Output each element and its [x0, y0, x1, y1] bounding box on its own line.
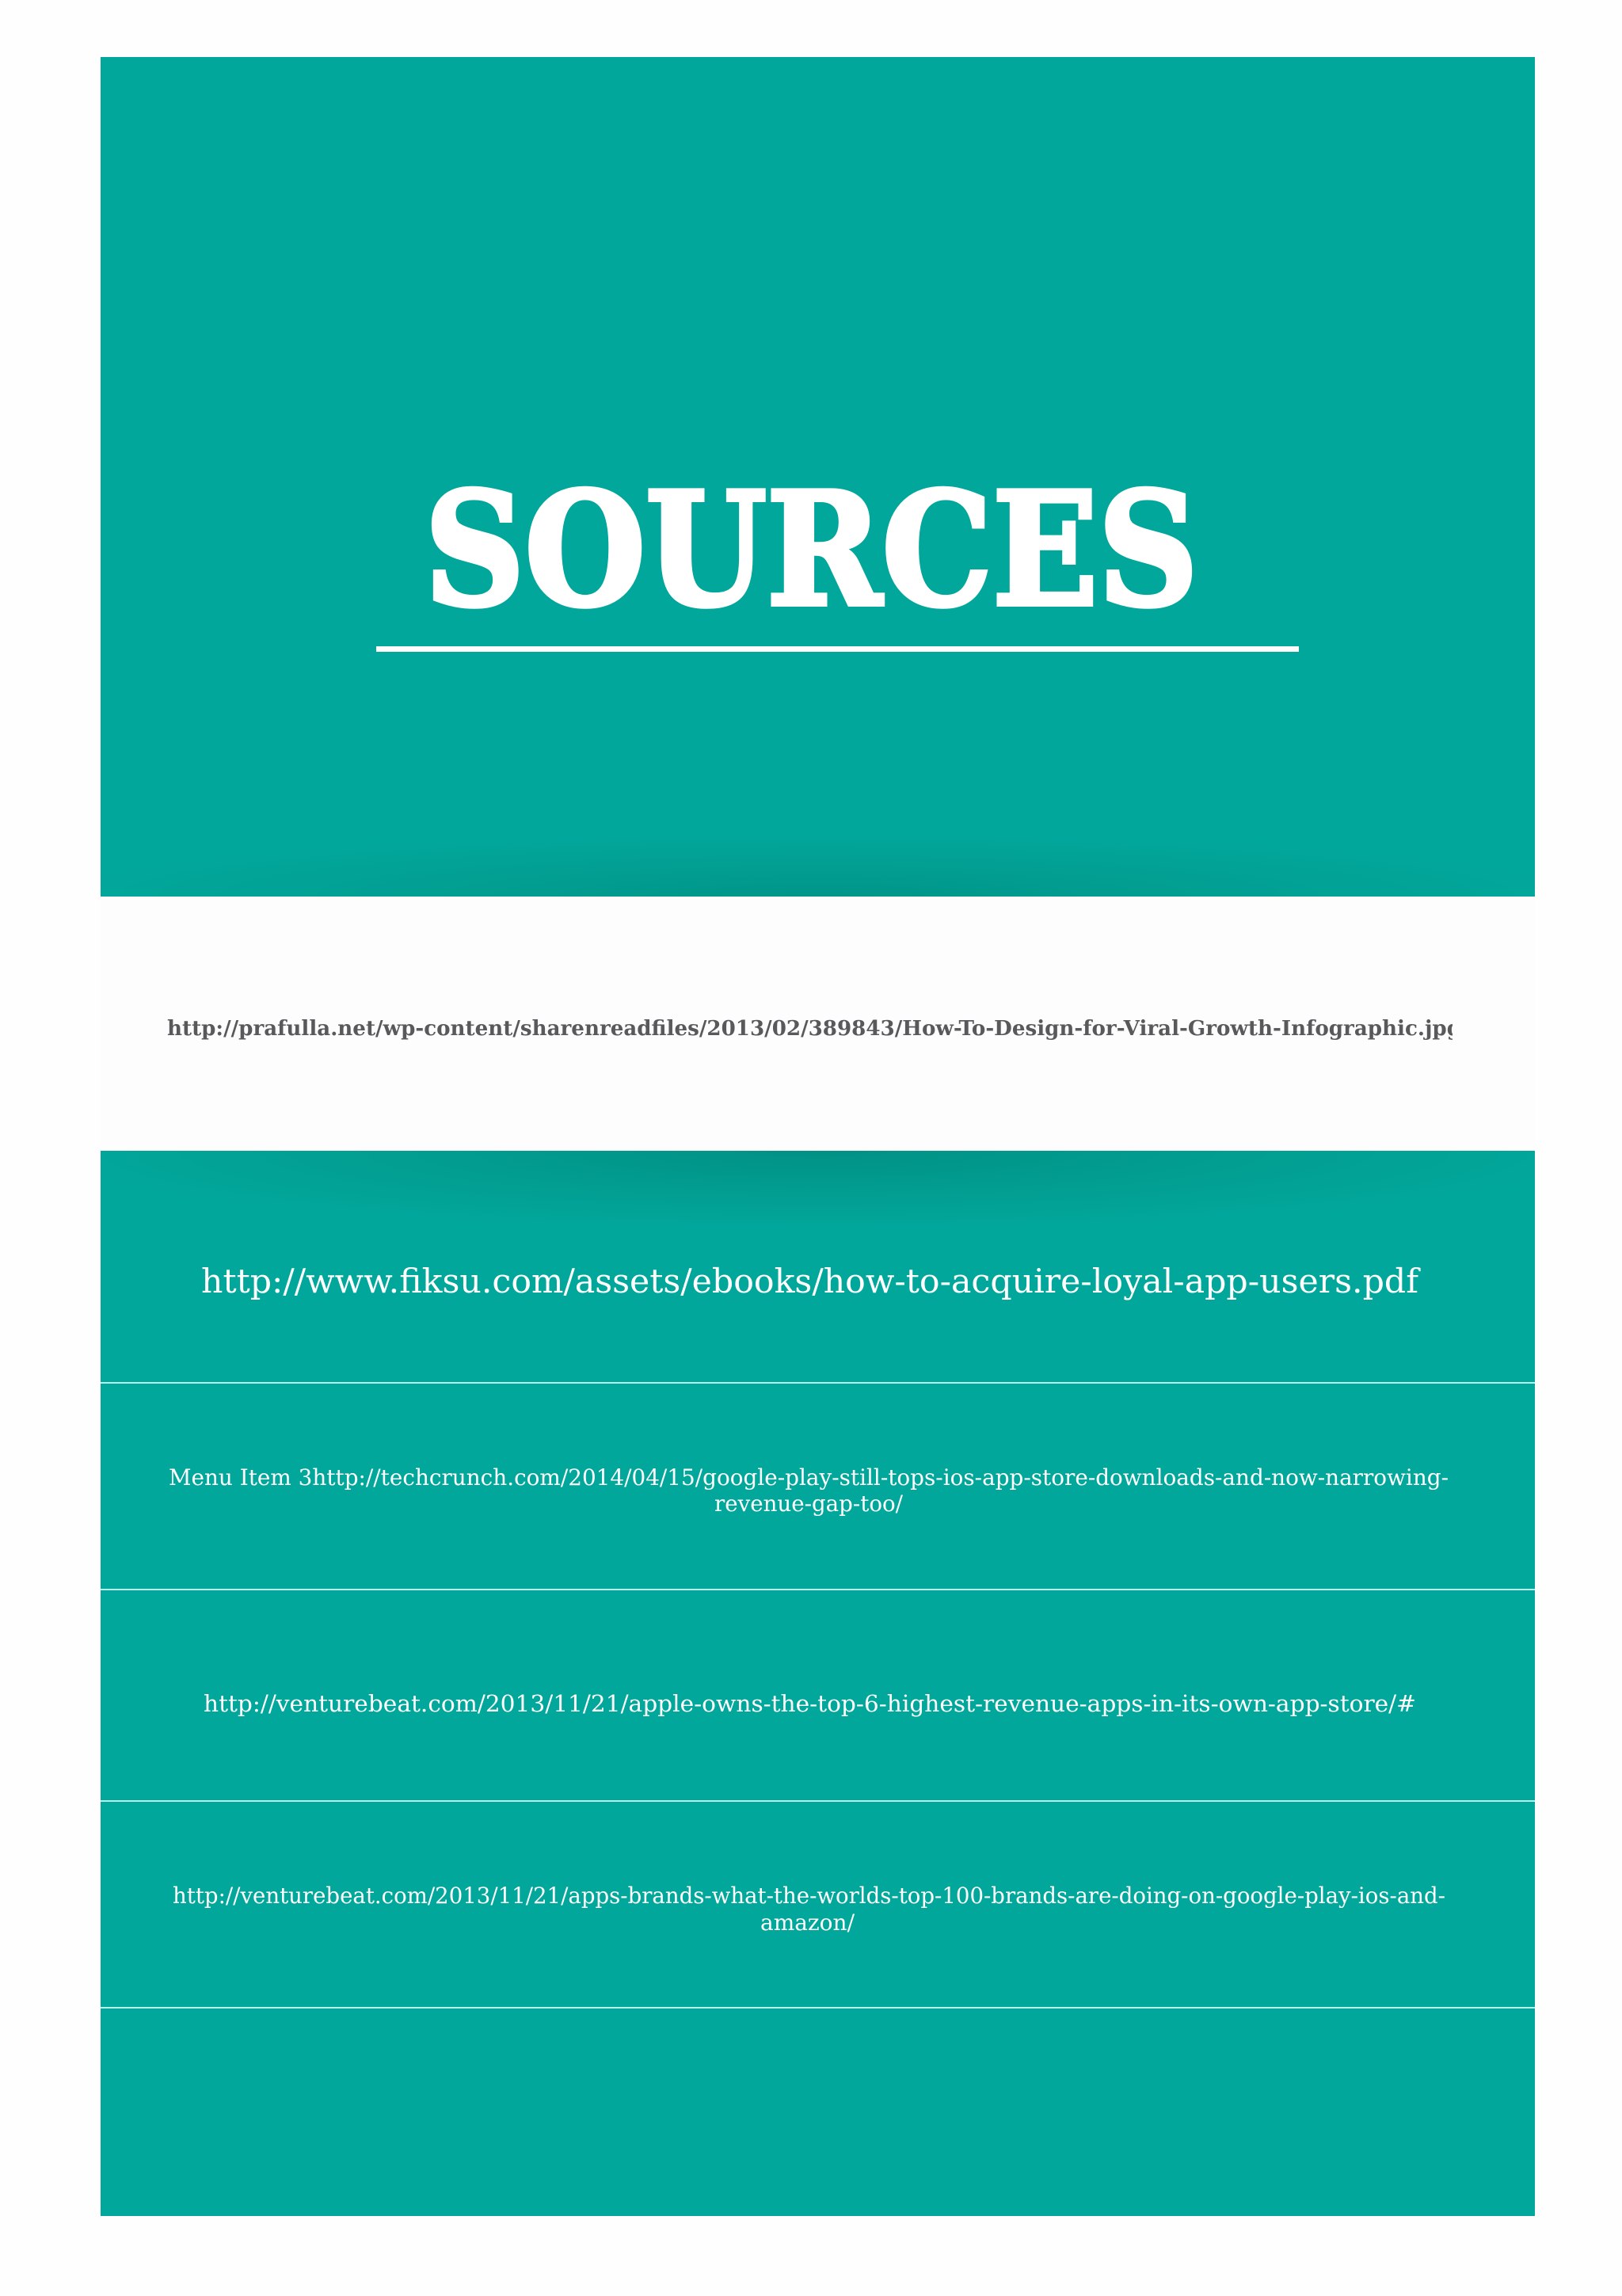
divider 3	[101, 1800, 1535, 1802]
divider 2	[101, 1589, 1535, 1590]
source link 2: http://www.fiksu.com/assets/ebooks/how-to-acquire-loyal-app-users.pdf	[201, 1262, 1422, 1300]
source link 1: http://prafulla.net/wp-content/sharenreadfiles/2013/02/389843/How-To-Design-for-Viral-Growth-Infographic.jpg	[167, 1016, 1461, 1041]
shadow below white band	[101, 1151, 1535, 1238]
title underline	[376, 646, 1299, 652]
divider 1	[101, 1382, 1535, 1384]
panel: white band, source 1	[101, 897, 1535, 1151]
title block	[376, 459, 1299, 652]
source link 4: http://venturebeat.com/2013/11/21/apple-owns-the-top-6-highest-revenue-apps-in-its-own-app-store/#	[204, 1690, 1416, 1717]
source link 3: revenue-gap-too/	[714, 1491, 904, 1517]
source link 3: Menu Item 3http://techcrunch.com/2014/04/15/google-play-still-tops-ios-app-store-downloads-and-now-narrowing-	[169, 1464, 1449, 1491]
divider 4	[101, 2007, 1535, 2009]
heading: SOURCES: SOURCES	[425, 459, 1198, 642]
source link 5: http://venturebeat.com/2013/11/21/apps-brands-what-the-worlds-top-100-brands-are-doing-on-google-play-ios-and-	[173, 1883, 1445, 1909]
source link 5	[173, 1883, 1445, 1936]
source link 3	[169, 1464, 1449, 1517]
shadow above white band	[101, 824, 1535, 897]
source link 5: amazon/	[760, 1910, 855, 1936]
